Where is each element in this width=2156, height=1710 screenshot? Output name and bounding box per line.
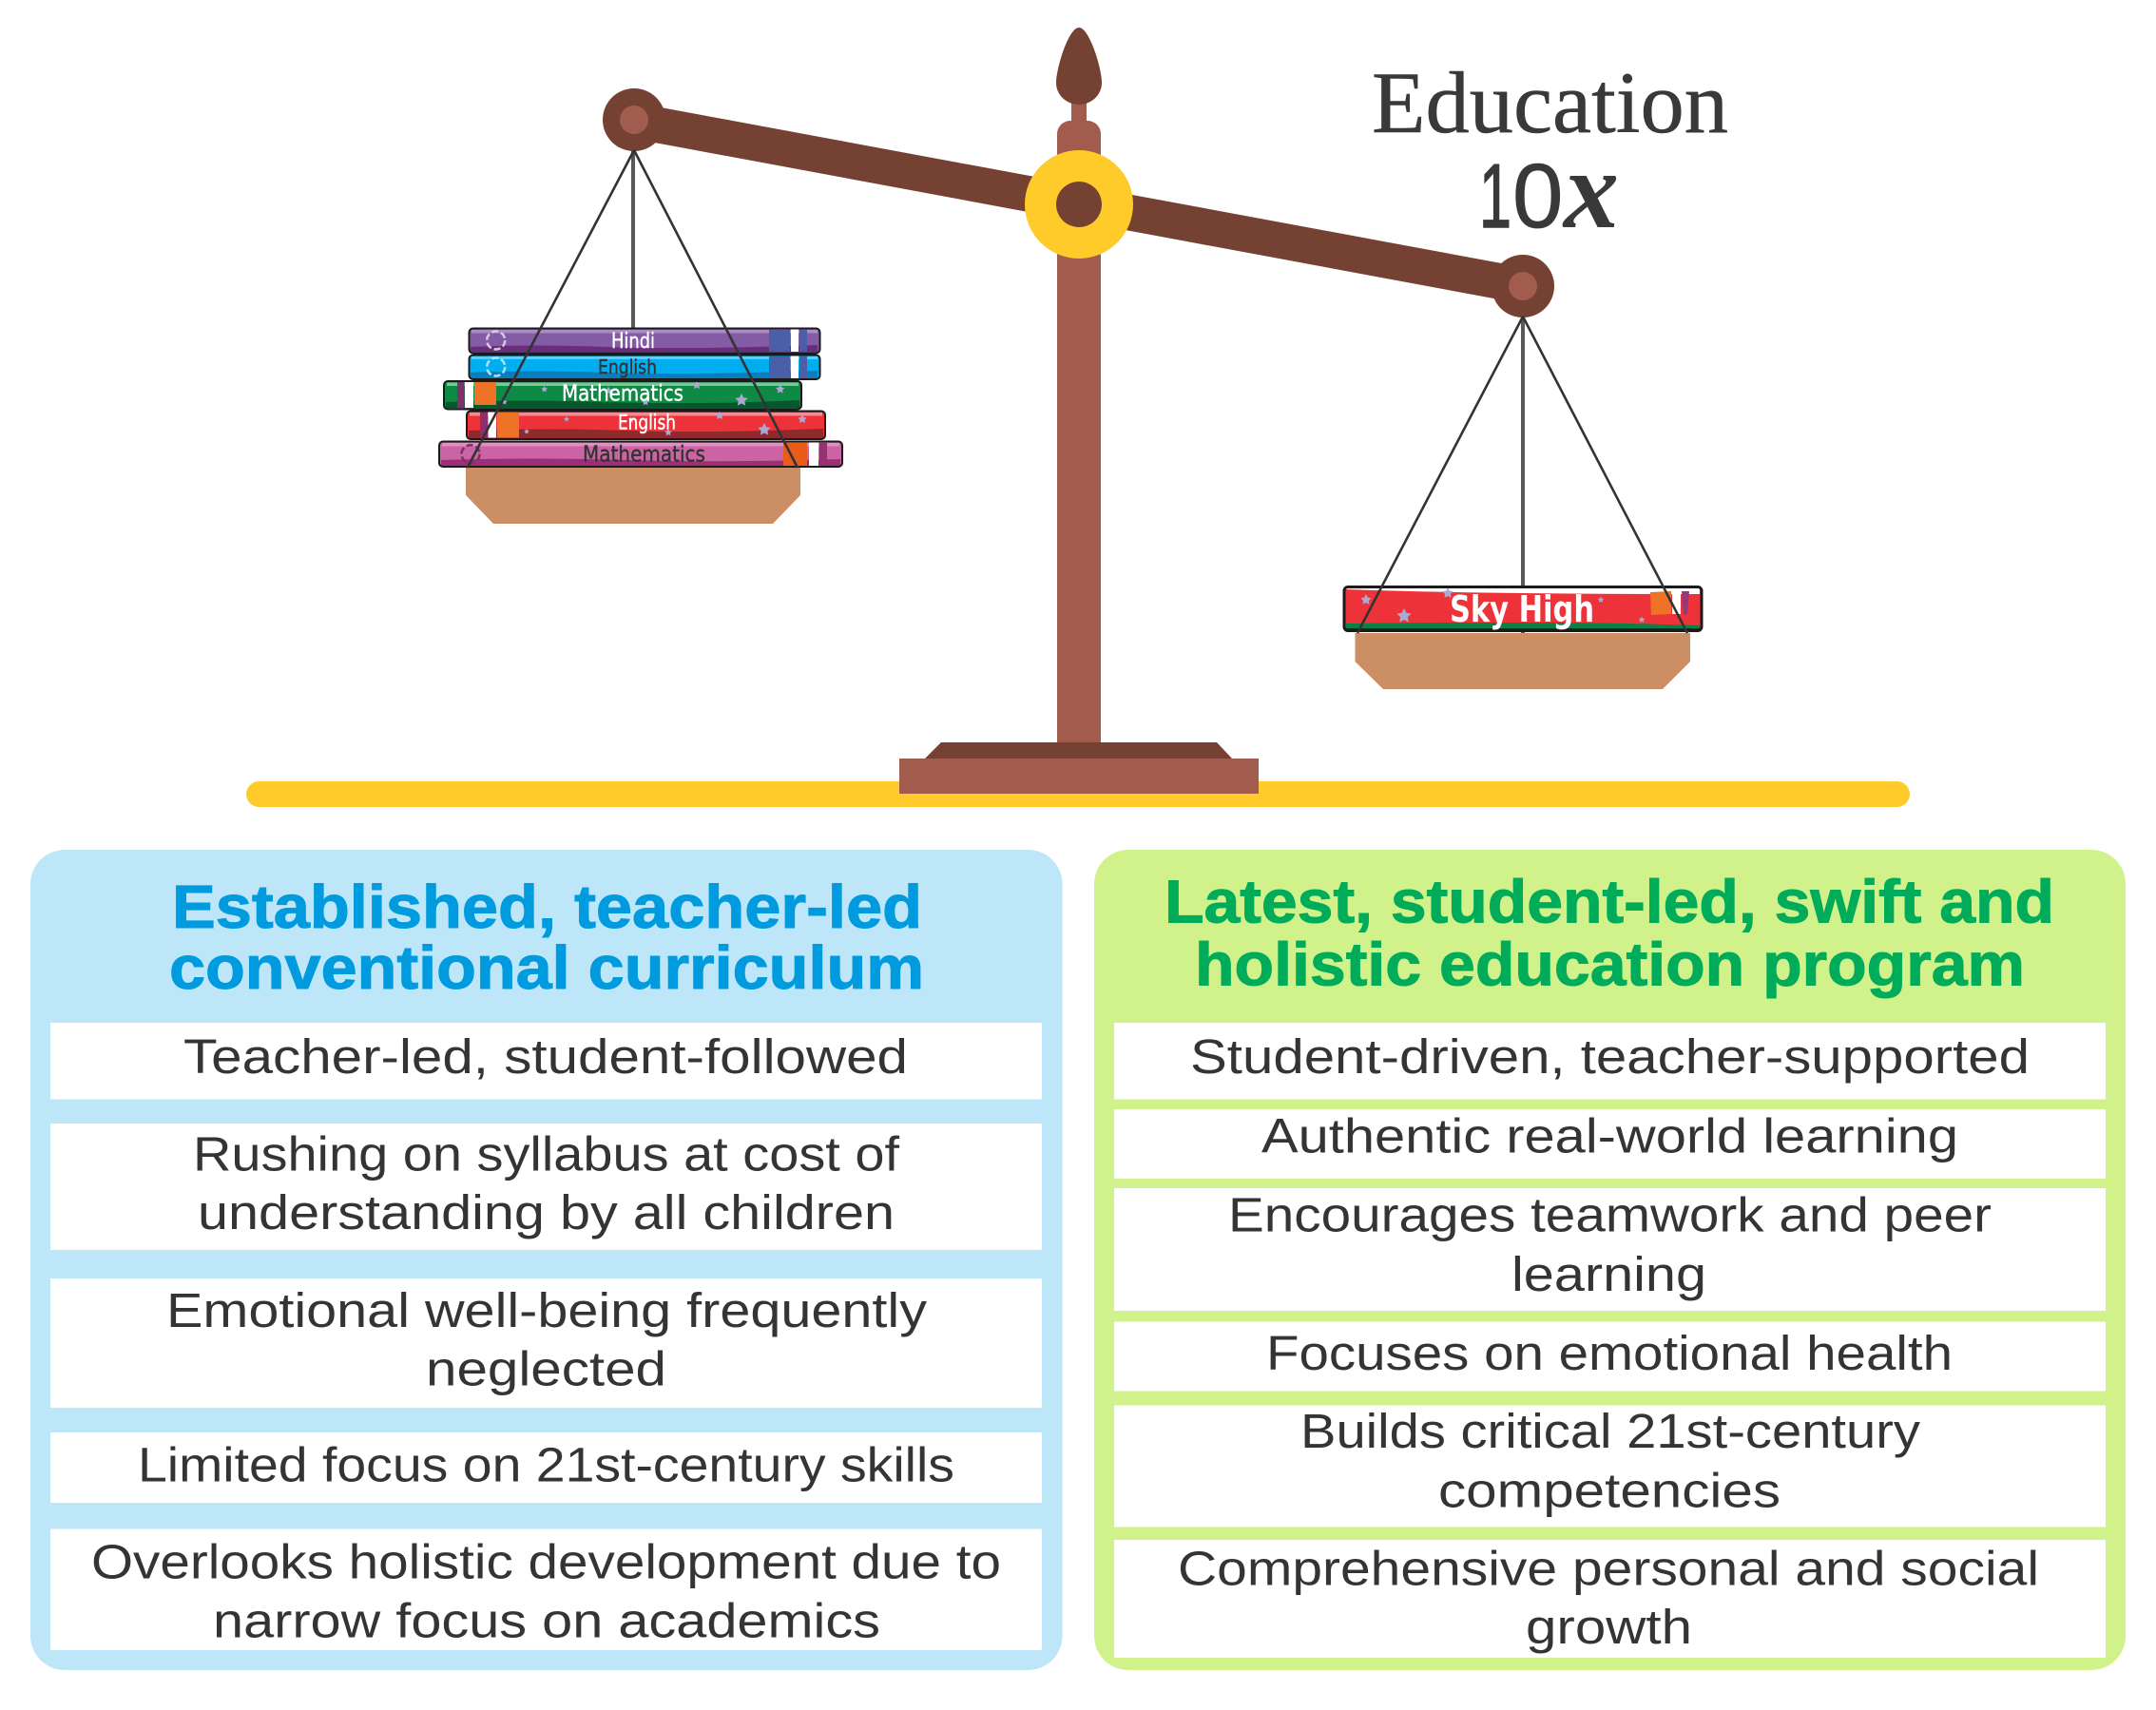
heading: holistic education program: holistic education program — [1195, 930, 2025, 998]
book: English blue — [470, 355, 819, 379]
book: Mathematics green — [444, 380, 801, 409]
row: personal and social growth: Comprehensive personal and social — [1178, 1542, 2039, 1595]
row: teamwork: learning — [1511, 1247, 1706, 1301]
book: Sky High — [1344, 587, 1702, 631]
book: English blue: English — [598, 355, 657, 378]
right pan — [1356, 633, 1690, 689]
row: personal and social growth: growth — [1526, 1600, 1692, 1654]
central pivot — [1025, 150, 1133, 259]
row: overlooks holistic development — [50, 1528, 1042, 1650]
row: teacher-led: Teacher-led, student-followed — [183, 1029, 908, 1084]
panel: holistic education program — [1094, 850, 2126, 1670]
row: emotional health — [1114, 1321, 2106, 1392]
scale pillar — [1056, 28, 1102, 751]
heading: holistic education program: Latest, student-led, swift and — [1165, 867, 2054, 935]
row: teamwork — [1114, 1188, 2106, 1311]
row: emotional health: Focuses on emotional health — [1266, 1326, 1953, 1380]
book: Hindi — [470, 329, 819, 354]
row: critical competencies: Builds critical 21st-century — [1300, 1404, 1921, 1458]
row: authentic learning: Authentic real-world learning — [1261, 1108, 1958, 1163]
row: emotional well-being: neglected — [426, 1342, 666, 1395]
row: critical competencies: competencies — [1438, 1464, 1781, 1517]
panel: conventional curriculum — [30, 850, 1063, 1670]
row: student-driven: Student-driven, teacher-supported — [1190, 1029, 2030, 1084]
balance scale — [603, 28, 1554, 794]
right pan with single book — [1344, 317, 1702, 689]
tilted beam — [603, 88, 1554, 317]
title: Education 10x: 0 — [1512, 145, 1563, 247]
row: personal and social growth — [1114, 1540, 2106, 1658]
book: English red — [467, 411, 825, 439]
book: Sky High: Sky High — [1450, 588, 1594, 630]
right side cords — [1357, 317, 1687, 633]
heading: conventional curriculum: conventional curriculum — [169, 933, 924, 1002]
left pan with book stack — [439, 150, 842, 524]
row: critical competencies — [1114, 1404, 2106, 1527]
heading: conventional curriculum: Established, teacher-led — [172, 873, 922, 941]
row: overlooks holistic development: narrow focus on academics — [213, 1593, 880, 1648]
right centre cord — [1521, 317, 1525, 635]
book: Mathematics pink — [439, 441, 842, 468]
book: Mathematics pink: Mathematics — [583, 443, 705, 468]
heading: holistic education program — [1165, 867, 2054, 998]
title: Education 10x: x — [1562, 127, 1619, 252]
left centre cord — [631, 150, 635, 329]
title: Education 10x: Education — [1372, 54, 1728, 151]
book: English red: English — [618, 411, 676, 433]
scale base — [899, 742, 1259, 794]
row: limited focus — [50, 1432, 1042, 1503]
row: emotional well-being: Emotional well-being frequently — [166, 1283, 928, 1337]
row: authentic learning — [1114, 1108, 2106, 1179]
book: Hindi: Hindi — [611, 330, 655, 354]
ground line — [246, 781, 1910, 807]
left side cords — [468, 150, 798, 468]
row: teamwork: Encourages teamwork and peer — [1228, 1188, 1992, 1241]
book: Mathematics green: Mathematics — [562, 382, 683, 407]
row: rushing on syllabus — [50, 1124, 1042, 1250]
row: overlooks holistic development: Overlooks holistic development due to — [91, 1534, 1001, 1589]
row: emotional well-being — [50, 1278, 1042, 1408]
row: rushing on syllabus: Rushing on syllabus at cost of — [193, 1127, 900, 1181]
row: teacher-led — [50, 1023, 1042, 1099]
row: limited focus: Limited focus on 21st-century skills — [138, 1437, 954, 1492]
row: student-driven — [1114, 1023, 2106, 1099]
left pan — [466, 468, 800, 524]
title: Education 10x: 1 — [1479, 145, 1511, 247]
row: rushing on syllabus: understanding by all children — [198, 1185, 895, 1239]
heading: conventional curriculum — [169, 873, 924, 1002]
title: Education 10x — [1372, 54, 1728, 252]
